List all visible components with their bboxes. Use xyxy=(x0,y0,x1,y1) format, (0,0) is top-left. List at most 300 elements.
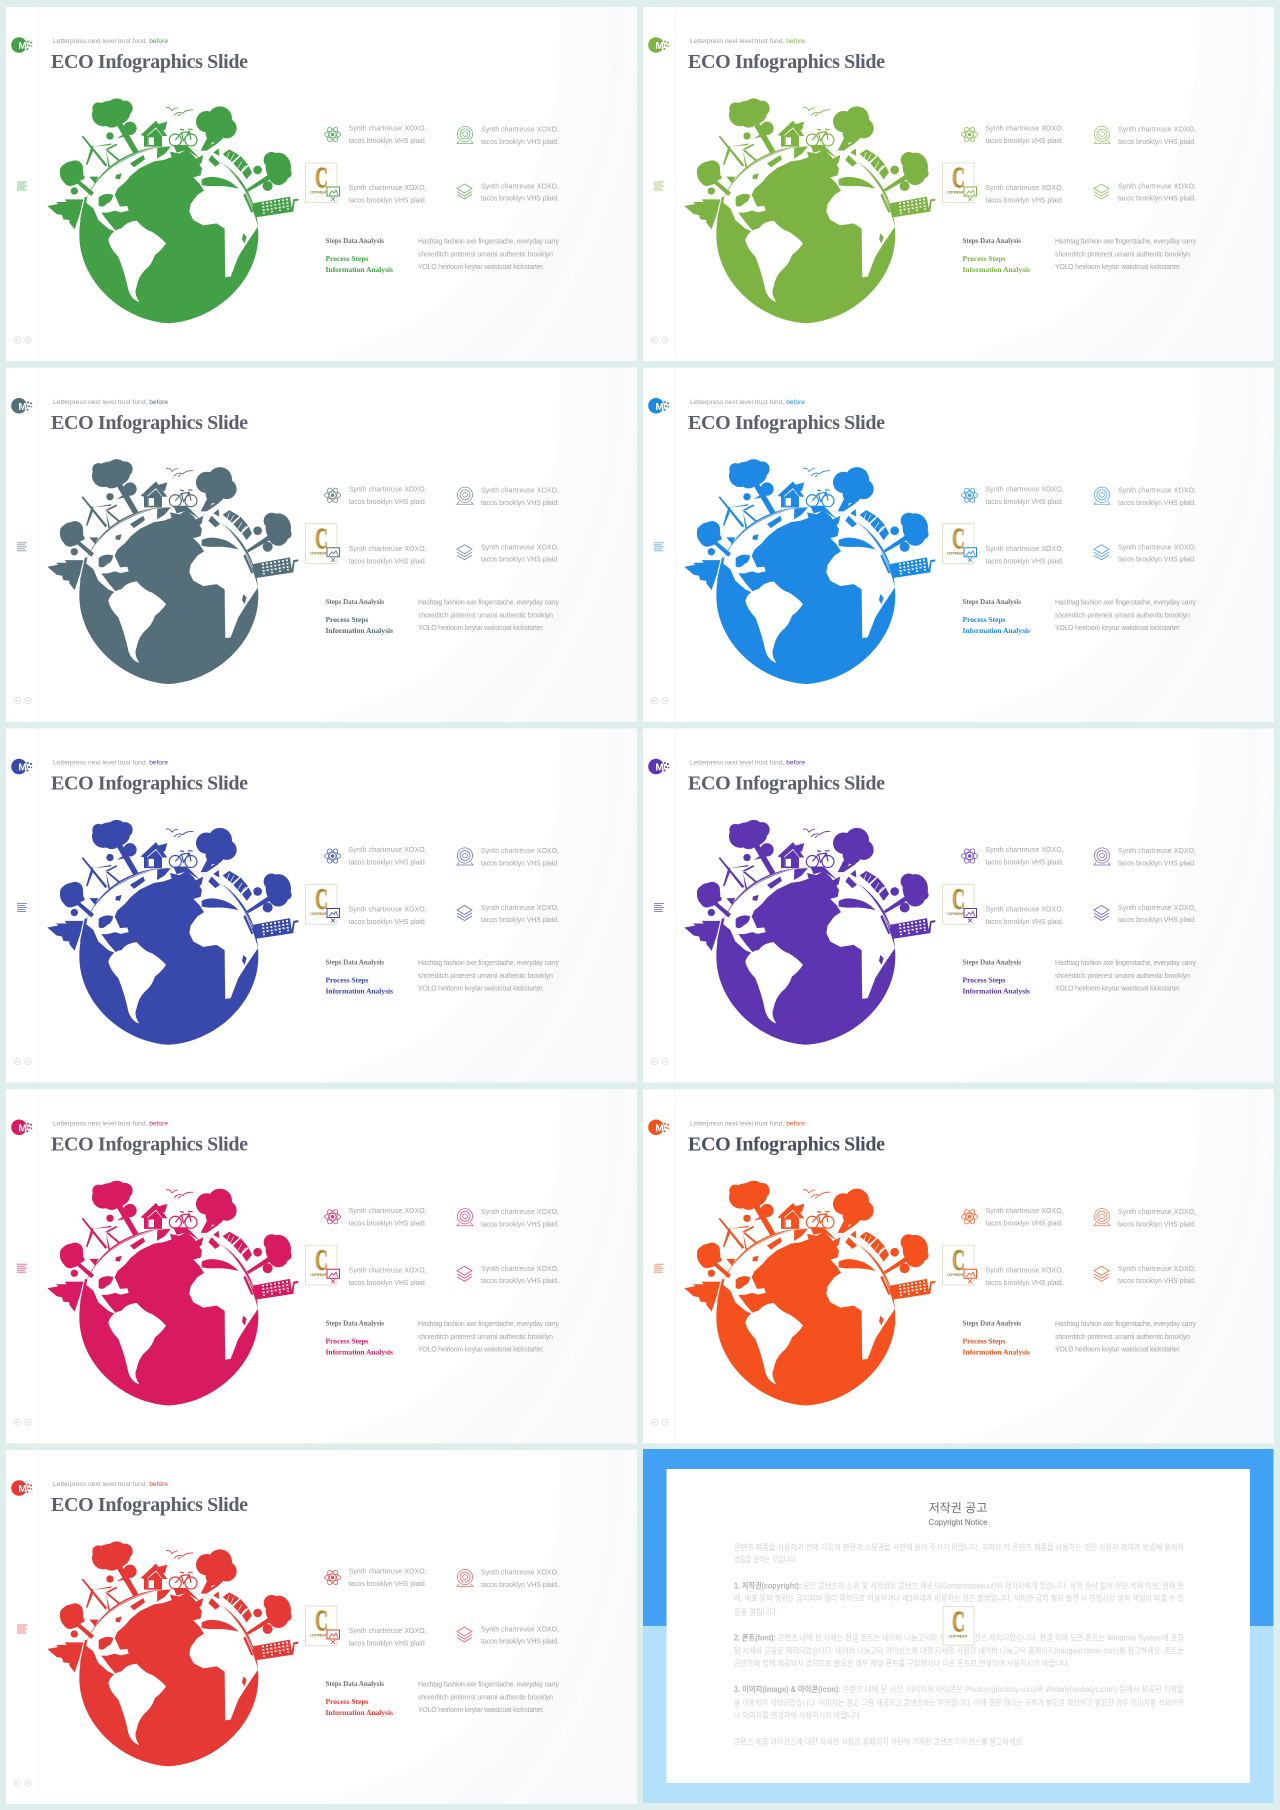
text: item three: tacos brooklyn VHS plaid. xyxy=(349,919,427,926)
analysis labels xyxy=(326,1680,393,1717)
icon: target xyxy=(457,848,473,865)
analysis labels: Steps Data Analysis xyxy=(962,1319,1021,1327)
analysis labels xyxy=(962,958,1030,996)
paragraph: YOLO heirloom keytar waistcoat kickstarter. xyxy=(418,625,544,632)
globe illustration xyxy=(47,1541,298,1766)
analysis labels xyxy=(962,237,1030,274)
paragraph: shoreditch pinterest umami authentic brooklyn xyxy=(418,973,553,980)
icon: atom xyxy=(325,847,341,865)
analysis labels: Process Steps xyxy=(962,1336,1006,1345)
text: item two: Synth chartreuse XOXO, xyxy=(481,126,559,134)
text: item four: tacos brooklyn VHS plaid. xyxy=(481,1278,559,1285)
text: item one: Synth chartreuse XOXO, xyxy=(349,486,427,493)
text: item four: tacos brooklyn VHS plaid. xyxy=(1118,196,1196,202)
notice heading: 저작권 공고 xyxy=(929,1501,987,1515)
logo xyxy=(648,37,669,53)
text: item one: tacos brooklyn VHS plaid. xyxy=(349,1220,427,1227)
navigation buttons xyxy=(14,1058,31,1065)
notice heading: Copyright Notice xyxy=(928,1518,988,1527)
navigation buttons xyxy=(14,337,31,343)
copyright stamp xyxy=(942,1245,976,1285)
text: item four: tacos brooklyn VHS plaid. xyxy=(481,917,559,924)
text: item one: tacos brooklyn VHS plaid. xyxy=(349,1581,427,1588)
paragraph xyxy=(1055,238,1197,271)
text: item three xyxy=(986,906,1064,926)
text: item four: tacos brooklyn VHS plaid. xyxy=(481,1638,559,1646)
paragraph: shoreditch pinterest umami authentic brooklyn xyxy=(418,612,553,619)
text: item one: tacos brooklyn VHS plaid. xyxy=(986,1220,1064,1227)
text: item two: tacos brooklyn VHS plaid. xyxy=(481,860,559,868)
text: item two xyxy=(481,1570,559,1589)
text: item one xyxy=(349,847,427,866)
panel: indigo slide xyxy=(6,716,660,1096)
text: item one: tacos brooklyn VHS plaid. xyxy=(349,860,427,866)
paragraph: YOLO heirloom keytar waistcoat kickstarter. xyxy=(1055,625,1181,632)
notice section 1 xyxy=(734,1580,1185,1616)
text: item two xyxy=(1118,1209,1196,1228)
text: item three xyxy=(349,906,427,926)
copyright stamp: C xyxy=(952,524,965,555)
navigation buttons xyxy=(651,698,668,704)
icon: target xyxy=(457,1209,473,1226)
text: item one xyxy=(349,1208,427,1227)
text: item three xyxy=(349,185,427,204)
paragraph: YOLO heirloom keytar waistcoat kickstarter. xyxy=(418,986,544,992)
title: ECO Infographics Slide xyxy=(688,772,885,794)
text: item two xyxy=(481,1209,559,1228)
logo: M xyxy=(18,41,27,52)
panel: copyright notice xyxy=(643,1449,1274,1803)
text: item four xyxy=(481,905,559,924)
text: item three: tacos brooklyn VHS plaid. xyxy=(986,558,1064,565)
text: item three: Synth chartreuse XOXO, xyxy=(349,1628,427,1635)
text: item four xyxy=(1118,1266,1196,1285)
text: item four xyxy=(481,1266,559,1285)
text: item four: Synth chartreuse XOXO, xyxy=(1118,905,1196,912)
analysis labels xyxy=(326,958,393,996)
title: ECO Infographics Slide xyxy=(51,51,248,73)
icon: layers xyxy=(457,906,472,920)
analysis labels: Steps Data Analysis xyxy=(326,1680,384,1688)
icon: atom xyxy=(325,1208,341,1225)
navigation buttons xyxy=(651,1419,668,1425)
paragraph xyxy=(1055,599,1197,632)
copyright stamp xyxy=(942,524,976,563)
icon: atom xyxy=(962,487,978,504)
text: item four: tacos brooklyn VHS plaid. xyxy=(481,556,559,563)
analysis labels: Information Analysis xyxy=(326,626,393,635)
text: item four: Synth chartreuse XOXO, xyxy=(481,905,559,912)
title: ECO Infographics Slide xyxy=(51,1133,248,1155)
text: item two xyxy=(1118,126,1196,146)
paragraph: Hashtag fashion axe fingerstache, everyday carry xyxy=(418,599,560,606)
text: item three: tacos brooklyn VHS plaid. xyxy=(986,1280,1064,1287)
text: item one: tacos brooklyn VHS plaid. xyxy=(986,860,1064,866)
paragraph: Hashtag fashion axe fingerstache, everyday carry xyxy=(418,238,560,246)
title: ECO Infographics Slide xyxy=(688,412,885,434)
notice section 3 xyxy=(734,1684,1184,1720)
icon: layers xyxy=(457,1266,472,1281)
text: item two: tacos brooklyn VHS plaid. xyxy=(481,1221,559,1228)
notice section 1: 1. 저작권(copyright): 모든 콘텐츠의 소유 및 저작권은 콘텐츠 제공사(Contentstokeout)와 제작자에게 있습니다. 사전 승낙 없이 무단 복제 이용, 전재 판 xyxy=(734,1580,1185,1590)
text: item four: Synth chartreuse XOXO, xyxy=(481,544,559,551)
text: item two: Synth chartreuse XOXO, xyxy=(481,487,559,494)
paragraph: shoreditch pinterest umami authentic brooklyn xyxy=(418,1334,553,1341)
copyright stamp: COPYRIGHT xyxy=(310,1632,328,1638)
analysis labels: Process Steps xyxy=(962,976,1006,984)
text: item three: tacos brooklyn VHS plaid. xyxy=(986,919,1064,926)
paragraph: YOLO heirloom keytar waistcoat kickstarter. xyxy=(1055,1346,1181,1353)
icon: layers xyxy=(1094,184,1109,199)
copyright stamp: COPYRIGHT xyxy=(949,1634,969,1638)
text: item four: Synth chartreuse XOXO, xyxy=(1118,184,1196,190)
subtitle: Letterpress next level trust fund, before xyxy=(690,1120,805,1127)
sidebar marks xyxy=(17,1625,27,1633)
notice section 2 xyxy=(734,1632,1185,1668)
text: item four xyxy=(481,544,559,563)
notice intro: 콘텐츠 제품을 사용하기 전에 다음의 판권과 소유권을 사전에 읽어 주시기 바랍니다. 귀하가 이 콘텐츠 제품을 사용하는 것은 사용자 계약과 보증에 동의하 xyxy=(734,1542,1185,1552)
analysis labels xyxy=(326,1319,393,1356)
analysis labels: Process Steps xyxy=(326,1697,369,1706)
icon: atom xyxy=(325,487,341,504)
analysis labels: Process Steps xyxy=(326,1336,369,1345)
title: ECO Infographics Slide xyxy=(688,51,885,73)
text: item four: tacos brooklyn VHS plaid. xyxy=(1118,556,1196,563)
paragraph: YOLO heirloom keytar waistcoat kickstarter. xyxy=(418,1346,544,1353)
panel: pink slide xyxy=(6,1077,660,1457)
text: item one: Synth chartreuse XOXO, xyxy=(349,847,427,854)
copyright stamp xyxy=(306,1245,340,1285)
text: item three: tacos brooklyn VHS plaid. xyxy=(349,1640,427,1648)
text: item three: Synth chartreuse XOXO, xyxy=(349,185,427,192)
title: ECO Infographics Slide xyxy=(688,1133,885,1155)
navigation buttons xyxy=(651,1058,668,1065)
text: item four xyxy=(1118,544,1196,563)
text: item one: Synth chartreuse XOXO, xyxy=(986,486,1064,493)
copyright stamp: C xyxy=(315,524,328,555)
text: item two xyxy=(1118,487,1196,507)
copyright stamp: COPYRIGHT xyxy=(310,190,328,194)
notice section 2: 콘텐츠와 함께 제공되지 않으므로 필요한 경우 해당 폰트를 구입하거나 다른 폰트로 변경하여 사용하시기 바랍니다. xyxy=(734,1658,1070,1668)
notice intro: 셨음을 알리는 것입니다. xyxy=(734,1554,797,1564)
text: item three xyxy=(986,546,1064,565)
analysis labels: Information Analysis xyxy=(962,626,1030,635)
globe illustration xyxy=(47,820,298,1045)
icon: atom xyxy=(325,126,341,143)
icon: target xyxy=(1094,848,1110,865)
icon: layers xyxy=(457,545,472,560)
text: item two xyxy=(481,487,559,507)
notice heading xyxy=(928,1501,988,1527)
text: item two: Synth chartreuse XOXO, xyxy=(1118,487,1196,494)
analysis labels xyxy=(962,598,1030,635)
globe illustration xyxy=(684,459,935,684)
globe illustration xyxy=(684,820,935,1045)
analysis labels: Information Analysis xyxy=(326,265,393,274)
text: item two: tacos brooklyn VHS plaid. xyxy=(1118,500,1196,507)
sidebar marks xyxy=(17,182,27,190)
paragraph: Hashtag fashion axe fingerstache, everyday carry xyxy=(1055,1321,1197,1328)
paragraph xyxy=(418,599,560,632)
panel: light green slide xyxy=(643,0,1280,375)
logo xyxy=(648,759,669,774)
text: item two: tacos brooklyn VHS plaid. xyxy=(1118,139,1196,146)
sidebar marks xyxy=(654,182,664,190)
text: item one: tacos brooklyn VHS plaid. xyxy=(349,138,427,145)
paragraph: Hashtag fashion axe fingerstache, everyday carry xyxy=(1055,960,1197,967)
paragraph: shoreditch pinterest umami authentic brooklyn xyxy=(418,1694,553,1702)
icon: atom xyxy=(962,847,978,865)
paragraph: YOLO heirloom keytar waistcoat kickstarter. xyxy=(1055,264,1181,271)
text: item one xyxy=(986,1208,1064,1227)
logo: M xyxy=(655,41,664,52)
copyright stamp: COPYRIGHT xyxy=(947,1272,965,1277)
globe illustration xyxy=(684,98,935,323)
notice intro xyxy=(734,1542,1185,1564)
icon: target xyxy=(457,487,473,504)
subtitle: Letterpress next level trust fund, before xyxy=(690,760,805,766)
icon: atom xyxy=(962,1208,978,1225)
analysis labels: Information Analysis xyxy=(962,986,1030,996)
sidebar marks xyxy=(654,1264,664,1272)
copyright stamp: C xyxy=(952,163,965,194)
text: item two: tacos brooklyn VHS plaid. xyxy=(481,139,559,146)
analysis labels: Information Analysis xyxy=(326,1347,393,1356)
text: item two xyxy=(481,126,559,146)
text: item two: Synth chartreuse XOXO, xyxy=(1118,1209,1196,1216)
globe illustration xyxy=(684,1181,935,1406)
copyright stamp xyxy=(942,163,976,203)
analysis labels xyxy=(962,1319,1030,1356)
text: item four xyxy=(1118,184,1196,202)
subtitle: Letterpress next level trust fund, before xyxy=(53,38,168,45)
paragraph: YOLO heirloom keytar waistcoat kickstarter. xyxy=(418,1707,544,1714)
sidebar marks xyxy=(654,543,664,551)
globe illustration xyxy=(47,98,298,323)
logo xyxy=(11,759,32,774)
text: item two: tacos brooklyn VHS plaid. xyxy=(481,500,559,507)
logo: M xyxy=(18,402,27,413)
text: item two: Synth chartreuse XOXO, xyxy=(481,848,559,855)
analysis labels: Information Analysis xyxy=(326,1708,393,1717)
text: item two: Synth chartreuse XOXO, xyxy=(1118,848,1196,855)
panel: orange slide xyxy=(643,1077,1280,1457)
paragraph xyxy=(1055,1321,1197,1353)
icon: layers xyxy=(457,184,472,199)
globe illustration xyxy=(47,459,298,684)
logo: M xyxy=(18,1484,27,1495)
subtitle: Letterpress next level trust fund, before xyxy=(690,399,805,406)
analysis labels: Steps Data Analysis xyxy=(326,237,384,245)
subtitle: Letterpress next level trust fund, before xyxy=(53,1120,168,1127)
notice section 3: 나 이미지를 변경하여 사용하시기 바랍니다. xyxy=(734,1710,862,1720)
text: item one: tacos brooklyn VHS plaid. xyxy=(349,499,427,506)
text: item four xyxy=(481,184,559,202)
icon: layers xyxy=(1094,906,1109,920)
logo: M xyxy=(655,402,664,413)
analysis labels: Process Steps xyxy=(326,976,369,984)
panel: red slide xyxy=(6,1438,660,1810)
text: item three xyxy=(349,1267,427,1287)
title: ECO Infographics Slide xyxy=(51,1494,248,1516)
sidebar marks xyxy=(17,904,27,912)
text: item one xyxy=(349,1568,427,1588)
text: item one: Synth chartreuse XOXO, xyxy=(349,1568,427,1576)
text: item one: Synth chartreuse XOXO, xyxy=(349,126,427,132)
paragraph: shoreditch pinterest umami authentic brooklyn xyxy=(1055,612,1190,619)
subtitle: Letterpress next level trust fund, before xyxy=(53,1481,168,1488)
text: item one xyxy=(986,486,1064,506)
text: item one: Synth chartreuse XOXO, xyxy=(986,126,1064,132)
text: item four: Synth chartreuse XOXO, xyxy=(1118,544,1196,551)
navigation buttons xyxy=(14,698,31,704)
text: item one: tacos brooklyn VHS plaid. xyxy=(986,138,1064,145)
text: item three: Synth chartreuse XOXO, xyxy=(349,546,427,553)
icon: layers xyxy=(1094,545,1109,560)
text: item four: Synth chartreuse XOXO, xyxy=(481,1626,559,1634)
icon: target xyxy=(1094,1209,1110,1226)
copyright stamp: COPYRIGHT xyxy=(947,190,965,194)
subtitle: Letterpress next level trust fund, before xyxy=(53,399,168,406)
paragraph: shoreditch pinterest umami authentic brooklyn xyxy=(1055,1334,1190,1341)
copyright stamp xyxy=(942,884,976,924)
logo xyxy=(648,398,669,414)
icon: layers xyxy=(457,1627,472,1642)
text: item two: Synth chartreuse XOXO, xyxy=(1118,126,1196,134)
text: item one: Synth chartreuse XOXO, xyxy=(349,1208,427,1215)
paragraph: YOLO heirloom keytar waistcoat kickstarter. xyxy=(418,264,544,271)
text: item three: tacos brooklyn VHS plaid. xyxy=(349,198,427,204)
copyright stamp: COPYRIGHT xyxy=(947,911,965,916)
text: item two: Synth chartreuse XOXO, xyxy=(481,1209,559,1216)
paragraph: Hashtag fashion axe fingerstache, everyday carry xyxy=(418,1682,560,1688)
text: item one xyxy=(349,486,427,506)
icon: layers xyxy=(1094,1266,1109,1281)
paragraph: Hashtag fashion axe fingerstache, everyday carry xyxy=(1055,599,1197,606)
paragraph xyxy=(418,960,560,992)
paragraph: Hashtag fashion axe fingerstache, everyday carry xyxy=(418,1321,560,1328)
analysis labels: Information Analysis xyxy=(962,265,1030,274)
logo: M xyxy=(655,1123,664,1134)
copyright stamp: C xyxy=(315,884,328,916)
paragraph: Hashtag fashion axe fingerstache, everyday carry xyxy=(418,960,560,967)
analysis labels: Steps Data Analysis xyxy=(962,958,1021,966)
copyright stamp xyxy=(306,524,340,563)
copyright stamp: C xyxy=(315,163,328,194)
sidebar marks xyxy=(17,543,27,551)
text: item one xyxy=(986,126,1064,145)
analysis labels: Steps Data Analysis xyxy=(962,237,1021,245)
subtitle: Letterpress next level trust fund, before xyxy=(53,760,168,766)
panel: purple slide xyxy=(643,716,1280,1096)
navigation buttons xyxy=(14,1780,31,1786)
text: item three xyxy=(986,185,1064,204)
paragraph: shoreditch pinterest umami authentic brooklyn xyxy=(1055,252,1190,258)
subtitle: Letterpress next level trust fund, before xyxy=(690,38,805,45)
analysis labels: Steps Data Analysis xyxy=(326,958,384,966)
text: item three xyxy=(986,1267,1064,1287)
text: item two: Synth chartreuse XOXO, xyxy=(481,1570,559,1576)
paragraph: shoreditch pinterest umami authentic brooklyn xyxy=(1055,973,1190,980)
notice footer: 콘텐츠 제품 라이선스에 대한 자세한 사항은 홈페이지 하단에 기재된 콘텐츠 라이선스를 참고하세요. xyxy=(734,1736,1024,1746)
copyright stamp: COPYRIGHT xyxy=(310,911,328,916)
title: ECO Infographics Slide xyxy=(51,412,248,434)
navigation buttons xyxy=(14,1419,31,1425)
text: item three xyxy=(349,546,427,565)
text: item two xyxy=(481,848,559,868)
text: item four: tacos brooklyn VHS plaid. xyxy=(1118,917,1196,924)
text: item three: Synth chartreuse XOXO, xyxy=(349,906,427,914)
analysis labels xyxy=(326,598,393,635)
copyright stamp xyxy=(306,1606,340,1646)
icon: target xyxy=(457,126,473,144)
text: item one: Synth chartreuse XOXO, xyxy=(986,847,1064,854)
copyright stamp: C xyxy=(315,1245,328,1276)
copyright stamp xyxy=(306,163,340,203)
copyright stamp: C xyxy=(952,1607,965,1638)
icon: target xyxy=(1094,487,1110,504)
paragraph: shoreditch pinterest umami authentic brooklyn xyxy=(418,252,553,258)
text: item four: tacos brooklyn VHS plaid. xyxy=(1118,1278,1196,1285)
text: item four xyxy=(1118,905,1196,924)
text: item two: tacos brooklyn VHS plaid. xyxy=(481,1582,559,1589)
analysis labels: Information Analysis xyxy=(962,1347,1030,1356)
text: item three: tacos brooklyn VHS plaid. xyxy=(349,1280,427,1287)
sidebar marks xyxy=(17,1264,27,1272)
notice section 3: 을 이용하여 제작되었습니다. 이미지는 참고 그림 제공되고 콘텐츠와는 무관합니다. 이에 관한 권리는 귀하가 별도로 확인하고 필요한 경우 이미지를 삭제하거 xyxy=(734,1698,1184,1708)
sidebar marks xyxy=(654,904,664,912)
logo xyxy=(11,398,32,414)
copyright stamp: C xyxy=(952,1245,965,1276)
logo: M xyxy=(655,762,664,774)
notice section 1: 음을 알립니다. xyxy=(734,1606,778,1616)
panel: slate slide xyxy=(6,356,660,736)
copyright stamp: COPYRIGHT xyxy=(310,1272,328,1277)
text: item four: Synth chartreuse XOXO, xyxy=(481,1266,559,1273)
copyright stamp: C xyxy=(315,1606,328,1637)
paragraph xyxy=(418,238,560,271)
copyright stamp: C xyxy=(952,884,965,916)
paragraph xyxy=(418,1321,560,1353)
icon: target xyxy=(1094,126,1110,144)
text: item three: tacos brooklyn VHS plaid. xyxy=(349,558,427,565)
paragraph: YOLO heirloom keytar waistcoat kickstarter. xyxy=(1055,986,1181,992)
text: item four: tacos brooklyn VHS plaid. xyxy=(481,196,559,202)
notice section 2: 된 서체와 글꼴로 제작되었습니다. 네이버 나눔고딕 라이선스에 대한 자세한 사항은 네이버 나눔고딕 홈페이지(hangeul.naver.com)를 참고하세요. 폰트는 xyxy=(734,1646,1184,1656)
analysis labels: Steps Data Analysis xyxy=(962,598,1021,606)
logo xyxy=(11,1119,32,1135)
copyright stamp xyxy=(943,1607,974,1645)
panel: green slide xyxy=(6,0,660,375)
copyright stamp xyxy=(306,884,340,924)
globe illustration xyxy=(47,1181,298,1406)
text: item three: Synth chartreuse XOXO, xyxy=(986,546,1064,553)
analysis labels: Process Steps xyxy=(326,254,369,263)
notice section 2: 2. 폰트(font): 콘텐츠 내에 된 서체는 한글 폰트는 네이버 나눔고딕의 서체로 라이선스 제작되었습니다. 한글 외의 모든 폰트는 Windows System에 포함 xyxy=(734,1632,1185,1642)
analysis labels: Process Steps xyxy=(326,615,369,624)
analysis labels: Steps Data Analysis xyxy=(326,1319,384,1327)
analysis labels: Process Steps xyxy=(962,254,1006,263)
text: item four: Synth chartreuse XOXO, xyxy=(481,184,559,190)
analysis labels: Process Steps xyxy=(962,615,1006,624)
icon: atom xyxy=(962,126,978,143)
text: item four: Synth chartreuse XOXO, xyxy=(1118,1266,1196,1273)
text: item one xyxy=(349,126,427,145)
text: item one: tacos brooklyn VHS plaid. xyxy=(986,499,1064,506)
text: item three: Synth chartreuse XOXO, xyxy=(986,185,1064,192)
copyright stamp: COPYRIGHT xyxy=(310,550,328,555)
text: item two: tacos brooklyn VHS plaid. xyxy=(1118,860,1196,868)
